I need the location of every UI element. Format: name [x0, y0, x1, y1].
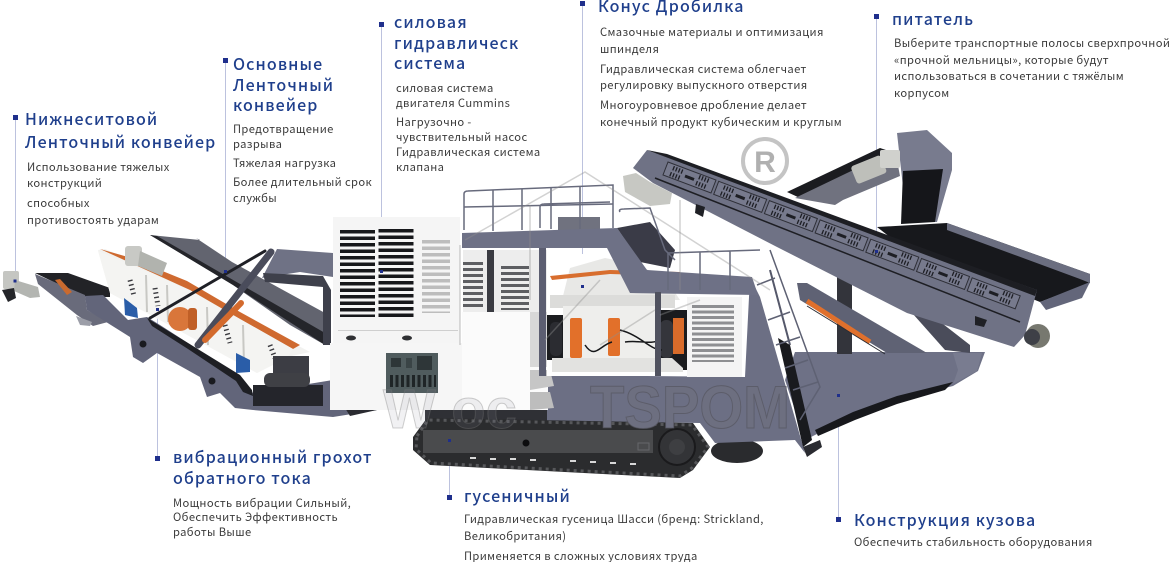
label: reverse vibrating screen: Мощность вибрации Сильный, — [173, 494, 351, 510]
label: lower screen conveyor — [25, 106, 216, 228]
label: body structure — [854, 507, 1093, 550]
vibrating screen — [98, 246, 310, 373]
leader lines — [16, 3, 876, 519]
access ladder — [757, 250, 822, 457]
label: crawler track: Великобритания) — [464, 528, 566, 544]
leader dots — [13, 1, 879, 522]
label: hydraulic power system: клапана — [396, 159, 444, 175]
label: reverse vibrating screen: вибрационный грохот — [173, 444, 373, 468]
label: feeder: корпусом — [894, 85, 950, 101]
body hopper and main frame — [545, 277, 985, 463]
label: cone crusher: конечный продукт кубическим и круглым — [600, 114, 842, 130]
label: lower screen conveyor: Использование тяжелых — [27, 158, 170, 174]
rear screen conveyor — [150, 235, 333, 345]
label: hydraulic power system: гидравлическ — [394, 30, 519, 54]
label: reverse vibrating screen: работы Выше — [173, 524, 252, 540]
label: feeder: использоваться в сочетании с тяжёлым — [894, 68, 1124, 84]
label: lower screen conveyor: Нижнеситовой — [25, 106, 158, 130]
feed hopper with belt — [877, 130, 1090, 310]
label: main belt conveyor: разрыва — [233, 136, 282, 152]
label: main belt conveyor: службы — [233, 190, 277, 206]
label: hydraulic power system: силовая система — [396, 80, 494, 96]
label: cone crusher: Гидравлическая система облегчает — [600, 60, 807, 76]
main inclined conveyor — [623, 150, 1050, 348]
conveyor supports — [770, 270, 970, 354]
upper feed conveyor — [787, 148, 900, 205]
watermark text: TSPOM — [590, 374, 790, 441]
upper grey vents — [463, 250, 547, 375]
label: reverse vibrating screen: обратного тока — [173, 465, 312, 489]
label: cone crusher: Многоуровневое дробление делает — [600, 97, 807, 113]
main discharge chassis — [85, 295, 377, 417]
watermark roof lines — [460, 172, 770, 345]
label: reverse vibrating screen — [173, 444, 373, 540]
label: main belt conveyor: конвейер — [233, 92, 318, 116]
label: lower screen conveyor: конструкций — [27, 175, 102, 191]
label: crawler track — [464, 483, 764, 562]
right cabinet — [687, 297, 742, 377]
label: lower screen conveyor: способных — [27, 195, 90, 211]
label: cone crusher — [598, 0, 842, 130]
power pack — [330, 217, 554, 410]
label: hydraulic power system: Гидравлическая система — [396, 144, 541, 160]
lower screen conveyor — [2, 271, 110, 326]
label: hydraulic power system: двигателя Cummins — [396, 95, 510, 111]
label: hydraulic power system — [394, 9, 541, 175]
label: feeder: Выберите транспортные полосы сверхпрочной — [894, 35, 1170, 51]
label: hydraulic power system: Нагрузочно - — [396, 114, 472, 130]
label: hydraulic power system: система — [394, 50, 466, 74]
label: lower screen conveyor: противостоять ударам — [27, 212, 159, 228]
label: main belt conveyor: Предотвращение — [233, 120, 334, 136]
label: hydraulic power system: чувствительный насос — [396, 129, 528, 145]
label: main belt conveyor: Более длительный срок — [233, 174, 372, 190]
label: main belt conveyor: Тяжелая нагрузка — [233, 155, 336, 171]
label: main belt conveyor: Основные — [233, 51, 323, 75]
label: hydraulic power system: силовая — [394, 9, 468, 33]
label: feeder — [892, 6, 1170, 101]
label: feeder: питатель — [892, 6, 974, 30]
label: main belt conveyor — [233, 51, 372, 206]
label: cone crusher: шпинделя — [600, 40, 659, 56]
label: reverse vibrating screen: Обеспечить Эффективность — [173, 509, 338, 525]
registered mark — [743, 139, 787, 183]
cone crusher — [547, 254, 687, 376]
label: cone crusher: регулировку выпускного отверстия — [600, 77, 808, 93]
label: body structure: Обеспечить стабильность оборудования — [854, 534, 1093, 550]
watermark text — [383, 374, 790, 441]
platform deck and railing — [462, 185, 760, 376]
support struts — [150, 251, 271, 345]
label: main belt conveyor: Ленточный — [233, 72, 334, 96]
label: cone crusher: Смазочные материалы и оптимизация — [600, 24, 824, 40]
label: crawler track: Гидравлическая гусеница Шасси (бренд: Strickland, — [464, 511, 764, 527]
label: crawler track: гусеничный — [464, 483, 571, 507]
watermark text: W oc — [383, 377, 517, 440]
label: feeder: «прочной мельницы», которые будут — [894, 52, 1109, 68]
caterpillar track — [413, 418, 710, 478]
control panel — [386, 353, 438, 393]
under-deck shadow — [425, 409, 547, 421]
label: body structure: Конструкция кузова — [854, 507, 1036, 531]
label: lower screen conveyor: Ленточный конвейер — [25, 129, 216, 153]
registered mark: R — [754, 146, 776, 179]
